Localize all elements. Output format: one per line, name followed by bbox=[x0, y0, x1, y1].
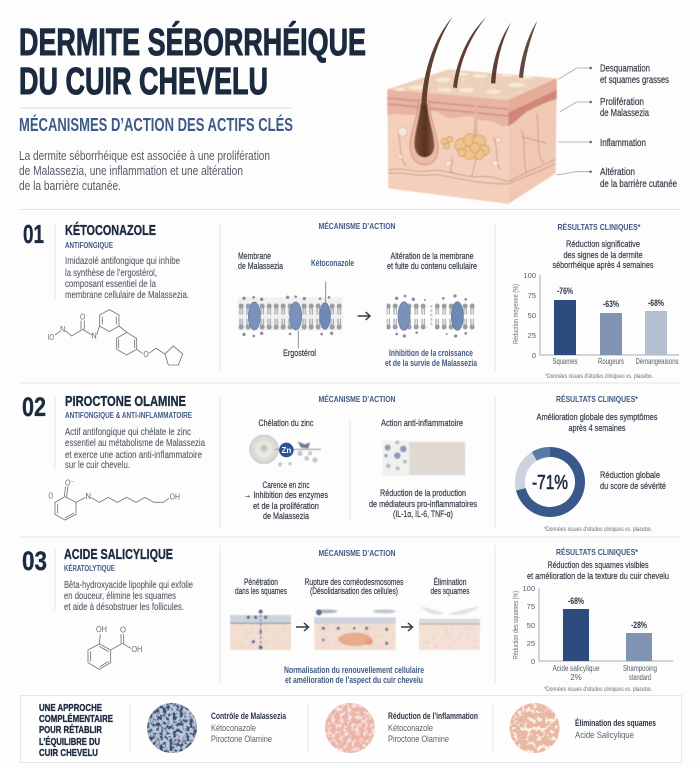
mediator reduction: (IL-1α, IL-6, TNF-α) bbox=[393, 509, 453, 520]
bar standard shampoo bbox=[626, 633, 652, 661]
y axis ticks: 25 bbox=[527, 639, 535, 648]
text: inflammation reduction bbox=[388, 711, 478, 745]
callout: desquamation: Desquamation bbox=[600, 64, 650, 74]
arrow bbox=[401, 623, 412, 631]
bar values: -68% bbox=[648, 298, 664, 308]
heading acide salicylique: ACIDE SALICYLIQUE bbox=[64, 547, 173, 563]
mechanism heading: MÉCANISME D’ACTION bbox=[318, 548, 396, 558]
label rupture: Rupture des cornéodesmosomes bbox=[304, 577, 404, 588]
dermis fibres bbox=[388, 113, 556, 184]
molecule: salicylic acid: OH bbox=[96, 624, 107, 634]
intro paragraph: La dermite séborrhéique est associée à une prolifération bbox=[19, 148, 270, 163]
bar values: -63% bbox=[603, 299, 619, 309]
arrow bbox=[358, 312, 370, 320]
mediator reduction: Réduction de la production bbox=[380, 488, 466, 499]
donut value: -71% bbox=[532, 472, 568, 494]
bar values bbox=[557, 286, 664, 309]
bar values: -68% bbox=[568, 596, 584, 606]
bar labels: 2% bbox=[570, 673, 582, 682]
description bbox=[65, 427, 205, 471]
text: scale elimination: Élimination des squames bbox=[575, 718, 656, 729]
intro paragraph: de Malassezia, une inflammation et une altération bbox=[19, 163, 243, 178]
molecule: ketoconazole: O bbox=[80, 312, 86, 322]
bar squames bbox=[554, 300, 576, 355]
y axis title: Réduction des squames (%) bbox=[513, 591, 520, 659]
bar labels: Squames bbox=[552, 357, 578, 366]
results heading: RÉSULTATS CLINIQUES* bbox=[558, 222, 641, 232]
y axis ticks: 50 bbox=[528, 311, 536, 320]
heading ketoconazole: KÉTOCONAZOLE bbox=[65, 222, 156, 239]
label membrane: Membrane bbox=[238, 251, 271, 262]
mechanism heading: MÉCANISME D’ACTION bbox=[318, 394, 396, 404]
donut caption: du score de sévérité bbox=[600, 481, 666, 492]
skin right face bbox=[508, 78, 557, 204]
label elimination: Élimination bbox=[434, 577, 466, 588]
text: inflammation reduction: Kétoconazole bbox=[388, 723, 433, 734]
intro paragraph bbox=[19, 148, 270, 193]
label rupture bbox=[304, 577, 404, 597]
hair 4 bbox=[519, 21, 537, 78]
bar labels: standard bbox=[629, 673, 651, 682]
hair 2 bbox=[453, 17, 487, 88]
text: inflammation reduction: Piroctone Olamine bbox=[388, 734, 449, 745]
description: et aide à désobstruer les follicules. bbox=[64, 602, 184, 613]
bar salicylic acid bbox=[563, 609, 589, 661]
label membrane alteration bbox=[387, 251, 477, 272]
intact membrane bbox=[238, 282, 343, 348]
y axis ticks: 50 bbox=[527, 621, 535, 630]
description: essentiel au métabolisme de Malassezia bbox=[65, 438, 205, 449]
mediator reduction: de médiateurs pro-inflammatoires bbox=[369, 499, 477, 510]
number 02: 02 bbox=[22, 392, 46, 422]
panel heading: UNE APPROCHE bbox=[39, 702, 102, 714]
hair bulb bbox=[414, 103, 434, 157]
panel heading: COMPLÉMENTAIRE bbox=[39, 712, 113, 725]
panel heading: L’ÉQUILIBRE DU bbox=[39, 735, 100, 748]
y axis ticks bbox=[523, 271, 536, 360]
skin top face bbox=[387, 69, 557, 100]
label zinc: Chélation du zinc bbox=[258, 418, 314, 429]
callout: desquamation bbox=[600, 64, 669, 86]
bar labels: Démangeaisons bbox=[636, 357, 678, 366]
mechanism conclusion: et de la survie de Malassezia bbox=[385, 358, 478, 369]
epidermis band right bbox=[508, 78, 557, 126]
results summary: Amélioration globale des symptômes bbox=[536, 412, 658, 423]
label membrane: de Malassezia bbox=[238, 261, 284, 272]
zinc consequence: Carence en zinc bbox=[262, 480, 310, 491]
panel heading: POUR RÉTABLIR bbox=[39, 723, 102, 736]
sebaceous duct bbox=[473, 105, 478, 137]
callout: proliferation bbox=[600, 97, 649, 119]
text: inflammation reduction: Réduction de l’inflammation bbox=[388, 711, 478, 722]
callout: proliferation: de Malassezia bbox=[600, 108, 649, 119]
icon: scaly skin bbox=[510, 703, 560, 753]
label ketoconazole: Kétoconazole bbox=[311, 258, 354, 269]
results summary bbox=[536, 412, 658, 434]
sebaceous gland bbox=[441, 134, 489, 160]
bar values bbox=[568, 596, 647, 630]
mechanism conclusion: Normalisation du renouvellement cellulaire bbox=[284, 665, 424, 676]
callout: barrier: de la barrière cutanée bbox=[600, 179, 677, 190]
description: la synthèse de l’ergostérol, bbox=[65, 268, 157, 279]
text: malassezia control: Contrôle de Malassezia bbox=[211, 711, 287, 722]
heading piroctone: PIROCTONE OLAMINE bbox=[65, 394, 186, 410]
callout: inflammation: Inflammation bbox=[600, 138, 646, 149]
molecule: piroctone: OH bbox=[170, 492, 180, 502]
category: KÉRATOLYTIQUE bbox=[64, 564, 115, 573]
number 01: 01 bbox=[23, 219, 44, 249]
molecule: ketoconazole: O bbox=[143, 349, 149, 359]
callout: proliferation: Prolifération bbox=[600, 97, 644, 108]
mechanism conclusion: Inhibition de la croissance bbox=[389, 348, 473, 359]
title: DERMITE SÉBORRHÉIQUE bbox=[19, 20, 366, 64]
panel: section 02 piroctone olamine bbox=[22, 392, 666, 533]
y axis ticks: 0 bbox=[532, 351, 536, 360]
footnote: *Données issues d’études cliniques vs. placebo. bbox=[545, 374, 653, 380]
panel: section 01 ketoconazole bbox=[23, 219, 679, 380]
diagram: penetration bbox=[230, 610, 291, 650]
subtitle: MÉCANISMES D’ACTION DES ACTIFS CLÉS bbox=[19, 114, 293, 135]
zinc consequence bbox=[244, 480, 328, 522]
category: ANTIFONGIQUE & ANTI-INFLAMMATOIRE bbox=[65, 411, 193, 420]
panel heading: CUIR CHEVELU bbox=[39, 747, 98, 759]
text: scale elimination bbox=[575, 718, 656, 741]
description: Imidazolé antifongique qui inhibe bbox=[65, 256, 180, 267]
results summary bbox=[527, 560, 669, 582]
label membrane alteration: et fuite du contenu cellulaire bbox=[387, 261, 477, 272]
bar labels: Acide salicylique bbox=[552, 664, 600, 673]
y axis ticks: 100 bbox=[522, 584, 535, 593]
mediator reduction bbox=[369, 488, 477, 520]
panel: complementary approach bbox=[20, 696, 682, 762]
molecule: ketoconazole bbox=[48, 310, 183, 365]
label anti-inflammatory: Action anti-inflammatoire bbox=[381, 418, 463, 429]
y axis ticks: 100 bbox=[523, 271, 536, 280]
bar rougeurs bbox=[600, 313, 622, 355]
description bbox=[65, 256, 189, 301]
label membrane alteration: Altération de la membrane bbox=[390, 251, 474, 262]
bar chart: reduction bbox=[513, 271, 679, 366]
description: et exerce une action anti-inflammatoire bbox=[65, 450, 202, 461]
skin callouts bbox=[557, 64, 677, 190]
molecule: salicylic acid: O bbox=[120, 624, 126, 634]
illustration: skin cross-section with hair bbox=[387, 17, 557, 204]
bar values: -28% bbox=[631, 620, 647, 630]
label penetration: dans les squames bbox=[235, 586, 287, 597]
diagram: membranes bbox=[238, 282, 476, 348]
description: sur le cuir chevelu. bbox=[65, 460, 130, 471]
molecule: piroctone: O bbox=[48, 490, 53, 500]
donut chart bbox=[520, 452, 580, 512]
molecule: ketoconazole: IO bbox=[48, 332, 55, 342]
zinc consequence: et de la prolifération bbox=[253, 501, 319, 512]
donut caption: Réduction globale bbox=[600, 470, 660, 481]
text: scale elimination: Acide Salicylique bbox=[575, 730, 634, 741]
icon: malassezia micrograph bbox=[147, 703, 197, 753]
results summary: après 4 semaines bbox=[568, 423, 626, 434]
zinc consequence: de Malassezia bbox=[263, 511, 310, 522]
donut caption bbox=[600, 470, 666, 492]
description: en douceur, élimine les squames bbox=[64, 591, 176, 602]
icon: inflamed skin bbox=[325, 703, 375, 753]
y axis ticks: 0 bbox=[531, 657, 535, 666]
text: malassezia control bbox=[211, 711, 287, 745]
results summary: Réduction des squames visibles bbox=[548, 560, 649, 571]
footnote: *Données issues d’études cliniques vs. placebo. bbox=[544, 687, 652, 693]
molecule: ketoconazole: N bbox=[91, 331, 97, 341]
molecule: salicylic acid bbox=[88, 624, 142, 669]
epidermis band front bbox=[387, 89, 508, 126]
label penetration bbox=[235, 577, 287, 597]
label penetration: Pénétration bbox=[244, 577, 278, 588]
results heading: RÉSULTATS CLINIQUES* bbox=[556, 394, 639, 404]
description: Actif antifongique qui chélate le zinc bbox=[65, 427, 191, 438]
footnote: *Données issues d’études cliniques vs. placebo. bbox=[544, 527, 652, 533]
description: membrane cellulaire de Malassezia. bbox=[65, 290, 189, 301]
mechanism heading: MÉCANISME D’ACTION bbox=[318, 221, 396, 231]
label elimination bbox=[430, 577, 470, 597]
label rupture: (Désolidarisation des cellules) bbox=[310, 586, 398, 597]
results summary: Réduction significative bbox=[566, 239, 640, 250]
hair 1 bbox=[421, 17, 453, 104]
title bbox=[19, 20, 366, 103]
description: Bêta-hydroxyacide lipophile qui exfolie bbox=[64, 580, 193, 591]
bar labels: Rougeurs bbox=[598, 357, 624, 366]
results summary: séborrhéique après 4 semaines bbox=[552, 260, 654, 271]
diagram: rupture bbox=[314, 609, 396, 650]
y axis ticks: 25 bbox=[528, 331, 536, 340]
molecule: piroctone bbox=[48, 478, 180, 520]
panel: section 03 salicylic acid bbox=[22, 545, 673, 693]
zinc ion: Zn bbox=[281, 446, 291, 455]
mechanism conclusion: et amélioration de l’aspect du cuir chevelu bbox=[285, 675, 423, 686]
text: malassezia control: Kétoconazole bbox=[211, 723, 256, 734]
results heading: RÉSULTATS CLINIQUES* bbox=[556, 547, 639, 557]
y axis title: Réduction moyenne (%) bbox=[513, 284, 520, 344]
molecule: salicylic acid: OH bbox=[131, 644, 142, 654]
results summary bbox=[552, 239, 654, 271]
bar labels bbox=[552, 357, 678, 366]
arrow bbox=[296, 623, 308, 631]
diagram: elimination bbox=[419, 606, 480, 650]
scales on surface bbox=[395, 72, 533, 94]
description bbox=[64, 580, 193, 613]
label ergosterol: Ergostérol bbox=[283, 348, 316, 359]
bar labels: Shampooing bbox=[623, 664, 657, 673]
bar demangeaisons bbox=[645, 311, 667, 355]
hair 3 bbox=[491, 23, 511, 83]
molecule: piroctone: O⁻ bbox=[65, 478, 74, 488]
disrupted membrane bbox=[387, 294, 476, 338]
callout: desquamation: et squames grasses bbox=[600, 75, 669, 86]
results summary: des signes de la dermite bbox=[564, 250, 642, 261]
category: ANTIFONGIQUE bbox=[65, 241, 114, 250]
zinc consequence: → Inhibition des enzymes bbox=[244, 490, 328, 501]
bar labels bbox=[552, 664, 657, 682]
description: composant essentiel de la bbox=[65, 279, 156, 290]
y axis ticks bbox=[522, 584, 535, 666]
skin front face bbox=[387, 89, 508, 204]
panel heading bbox=[39, 702, 113, 759]
label membrane bbox=[238, 251, 284, 272]
bar values: -76% bbox=[557, 286, 573, 296]
callout: barrier: Altération bbox=[600, 167, 635, 178]
number 03: 03 bbox=[22, 546, 47, 576]
y axis ticks: 75 bbox=[527, 602, 535, 611]
label elimination: des squames bbox=[430, 586, 470, 597]
intro paragraph: de la barrière cutanée. bbox=[19, 178, 121, 193]
molecule: ketoconazole: N bbox=[60, 324, 65, 334]
follicle capsule bbox=[410, 100, 438, 165]
callout leader lines bbox=[557, 67, 592, 175]
title: DU CUIR CHEVELU bbox=[19, 61, 268, 103]
mechanism conclusion bbox=[284, 665, 424, 686]
diagram: inflammatory mediators bbox=[382, 440, 466, 476]
text: malassezia control: Piroctone Olamine bbox=[211, 734, 272, 745]
bar chart: scales bbox=[513, 584, 673, 682]
diagram: zinc chelation bbox=[250, 435, 321, 466]
y axis ticks: 75 bbox=[528, 291, 536, 300]
mechanism conclusion bbox=[385, 348, 478, 369]
molecule: piroctone: N bbox=[85, 491, 91, 501]
callout: barrier bbox=[600, 167, 677, 190]
